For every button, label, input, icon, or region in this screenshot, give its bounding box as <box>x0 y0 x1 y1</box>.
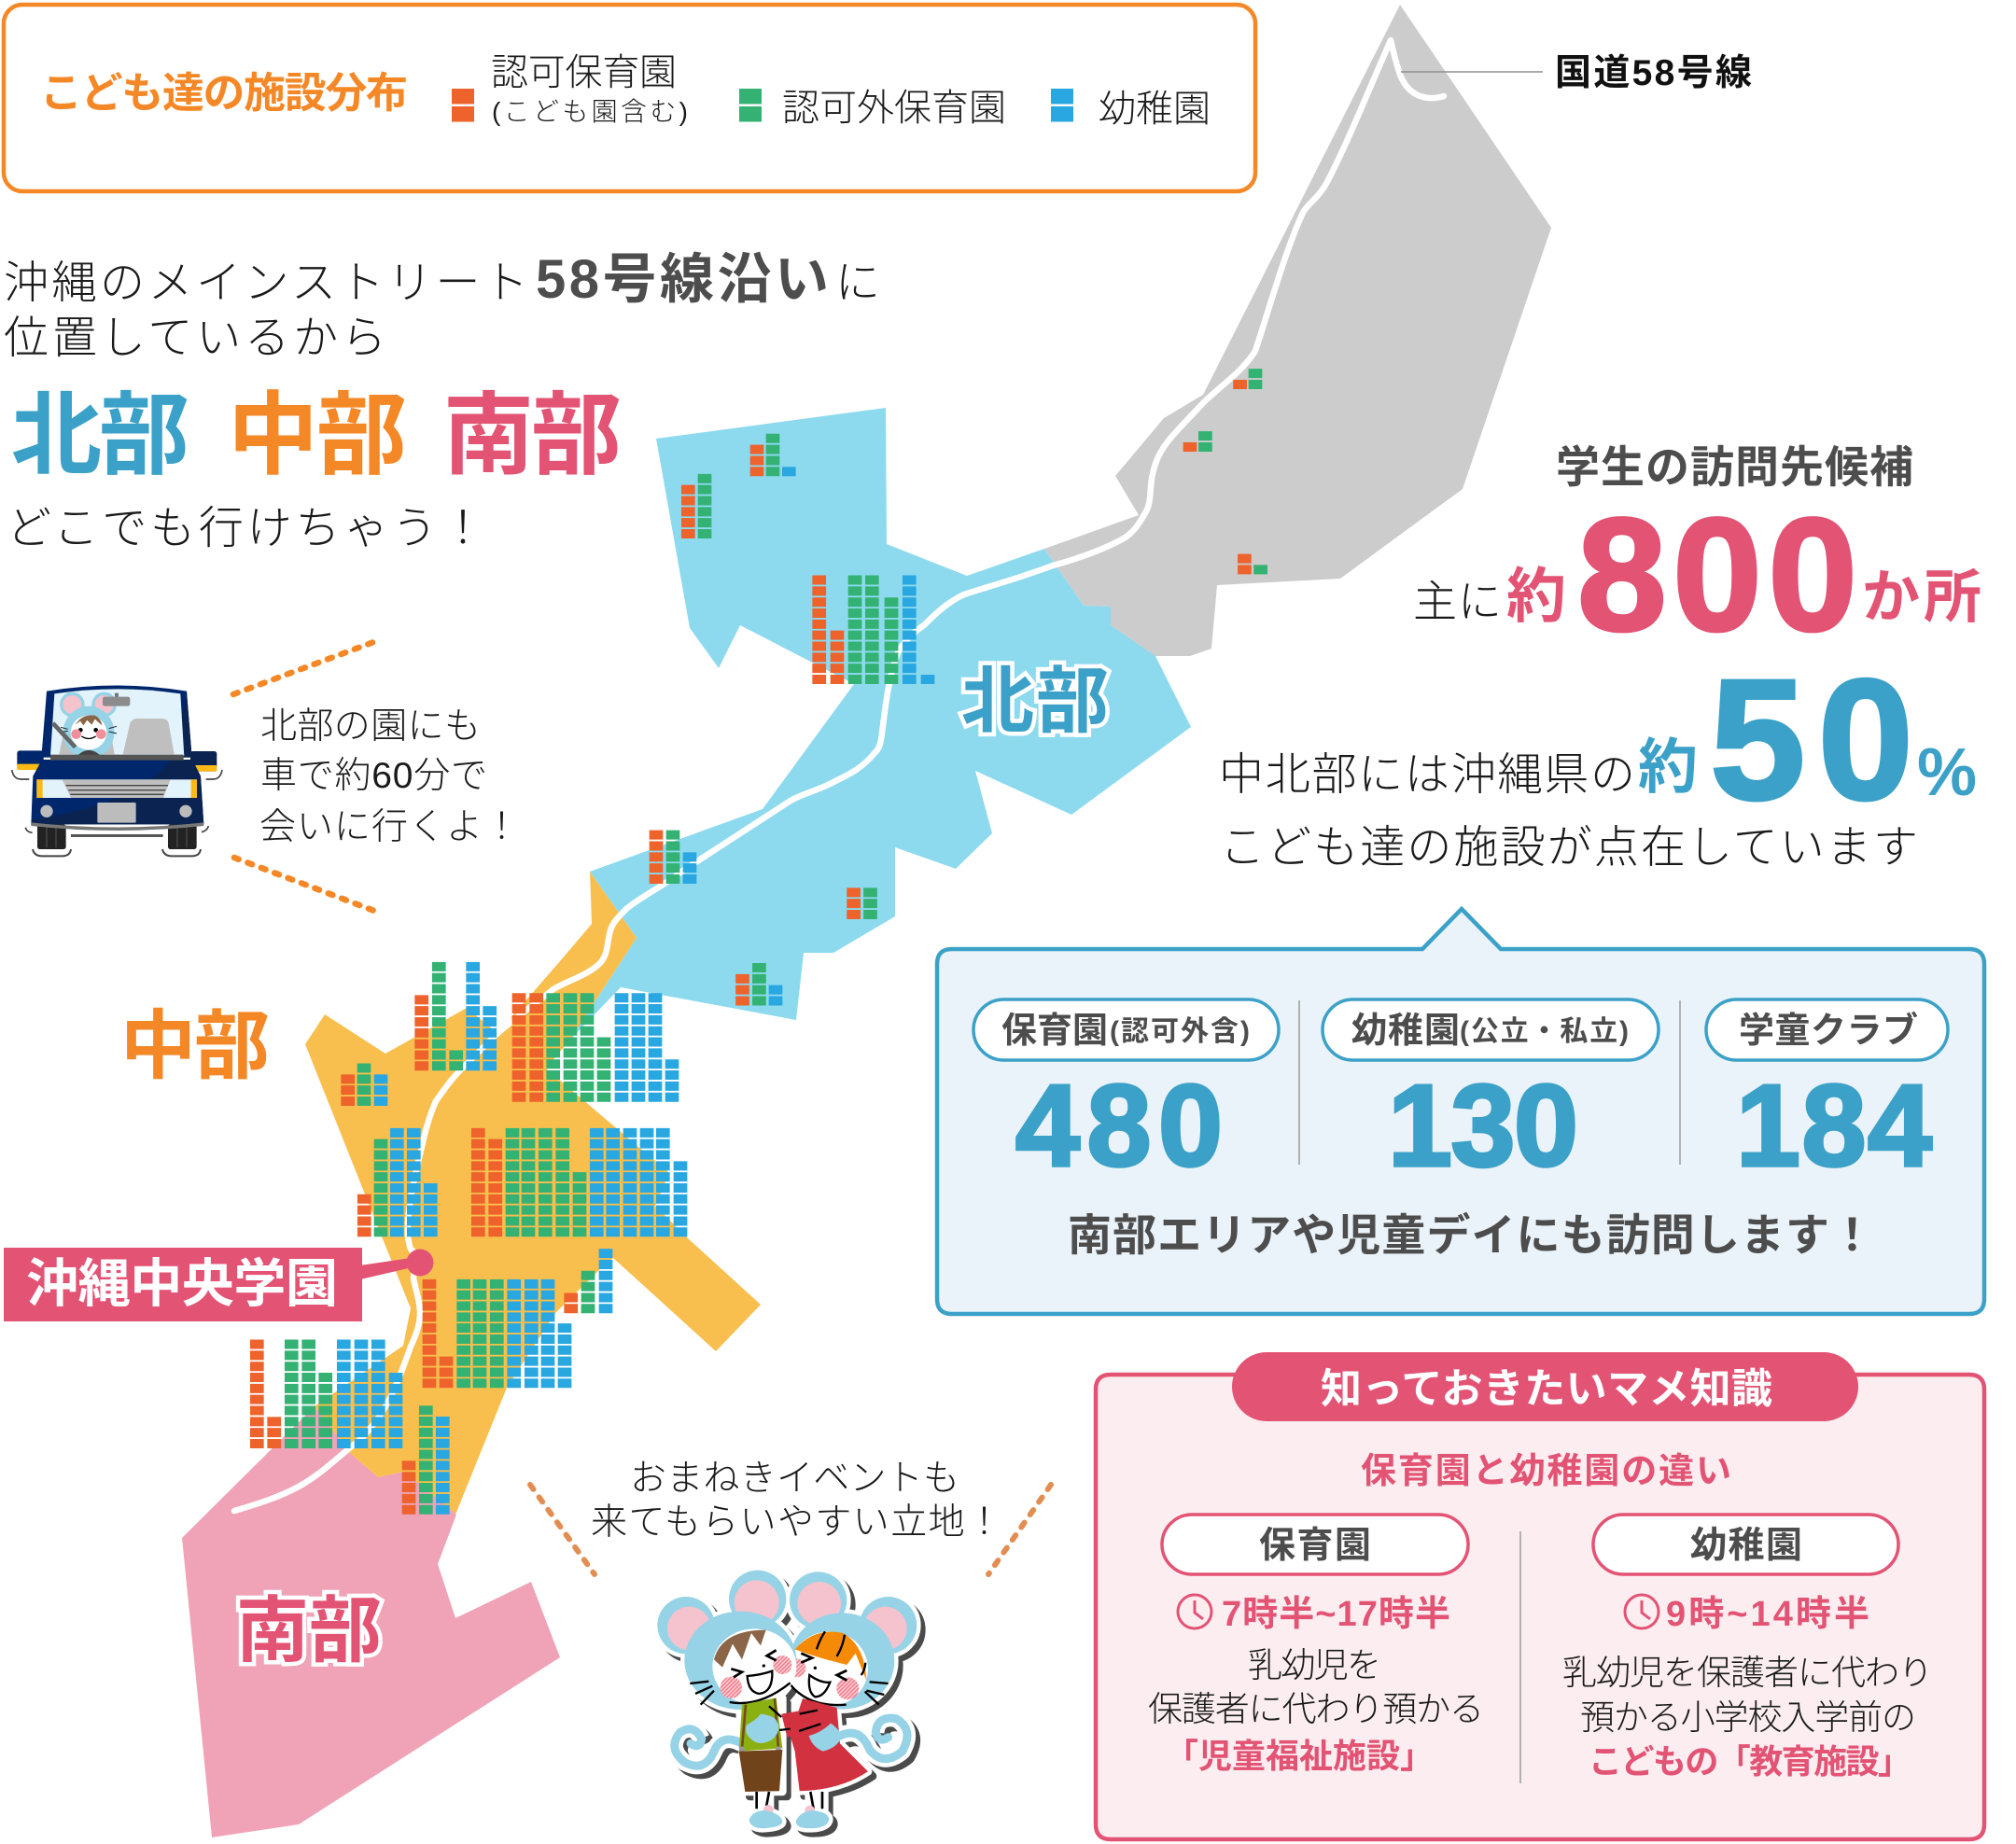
count: kindergarten <box>1323 999 1659 1191</box>
stat: 50 percent: こども達の施設が点在しています <box>1220 823 1918 873</box>
count: kindergarten: 幼稚園 <box>1351 1012 1460 1051</box>
region headline: 南部 <box>443 384 622 486</box>
count: nursery: 保育園 <box>1001 1012 1108 1051</box>
dotted callout lines: car <box>233 641 376 911</box>
panel: trivia <box>1096 1352 1984 1839</box>
column: kindergarten: 乳幼児を保護者に代わり <box>1562 1654 1933 1692</box>
stat: visit candidates: か所 <box>1862 566 1981 630</box>
column: kindergarten: 幼稚園 <box>1690 1526 1802 1566</box>
stat: 50 percent: % <box>1917 735 1977 810</box>
hugging arms <box>746 1706 842 1752</box>
count: nursery <box>973 999 1279 1191</box>
intro heading <box>4 249 880 363</box>
map label: south: 南部 <box>236 1589 382 1671</box>
map label: north: 北部 <box>961 660 1109 742</box>
count: after-school club: 学童クラブ <box>1739 1011 1918 1051</box>
map label: central: 中部 <box>120 1005 270 1089</box>
car caption: 車で約60分で <box>260 756 487 796</box>
region headline: 北部 <box>11 384 189 486</box>
column: nursery: 7時半~17時半 <box>1222 1595 1450 1634</box>
icon: clock <box>1178 1595 1211 1628</box>
illustration: mouse-costume children <box>657 1571 921 1833</box>
region: north blue <box>569 408 1191 1041</box>
facility blocks: north <box>656 434 928 1006</box>
school pin callout: 沖縄中央学園 <box>26 1254 338 1313</box>
stat: visit candidates: 800 <box>1577 485 1857 664</box>
car caption: 会いに行くよ！ <box>259 807 520 847</box>
icon: car with mouse driver <box>12 685 222 856</box>
column: nursery: 乳幼児を <box>1248 1646 1381 1684</box>
car caption <box>259 706 520 847</box>
facility blocks: south <box>257 1340 442 1515</box>
column: kindergarten: 預かる小学校入学前の <box>1580 1698 1916 1737</box>
intro heading: 位置しているから <box>4 314 386 363</box>
count: after-school club: 184 <box>1736 1062 1932 1191</box>
event caption <box>591 1459 1002 1543</box>
intro heading: 58号線沿い <box>536 249 829 310</box>
trivia subtitle: 保育園と幼稚園の違い <box>1361 1452 1731 1491</box>
road: route 58 <box>234 40 1444 1511</box>
girl <box>787 1572 917 1828</box>
legend panel <box>4 5 1255 191</box>
count: nursery: (認可外含) <box>1110 1016 1250 1047</box>
intro heading: 沖縄のメインストリート <box>4 258 528 308</box>
column: nursery: 保育園 <box>1259 1526 1371 1566</box>
route label: 国道58号線 <box>1555 53 1752 93</box>
sticker shadow <box>662 1575 921 1833</box>
facility blocks: central <box>348 962 680 1388</box>
stat: 50 percent: 50 <box>1710 643 1913 835</box>
stat: visit candidates: 主に <box>1413 577 1502 626</box>
region: central orange <box>305 872 761 1515</box>
region: south pink <box>182 1406 560 1837</box>
legend item: kindergarten: 幼稚園 <box>1099 89 1211 130</box>
stat: visit candidates: 学生の訪問先候補 <box>1556 442 1913 492</box>
facility blocks: far north <box>1190 369 1261 574</box>
count: kindergarten: 130 <box>1388 1062 1578 1191</box>
intro heading: に <box>835 258 880 308</box>
column: nursery: 「児童福祉施設」 <box>1165 1737 1434 1775</box>
legend item: unlicensed nursery: 認可外保育園 <box>782 88 1006 129</box>
column: kindergarten <box>1562 1515 1933 1781</box>
stat: 50 percent <box>1219 643 1977 873</box>
stat: visit candidates: 約 <box>1506 563 1566 630</box>
tails <box>675 1718 907 1766</box>
column: kindergarten: 9時~14時半 <box>1666 1595 1869 1634</box>
count: nursery: 480 <box>1015 1062 1223 1191</box>
count: kindergarten: (公立・私立) <box>1460 1016 1629 1047</box>
trivia title: 知っておきたいマメ知識 <box>1321 1366 1772 1412</box>
stat: visit candidates <box>1413 442 1981 664</box>
column: kindergarten: こどもの「教育施設」 <box>1589 1742 1911 1781</box>
sticker white outline <box>657 1571 917 1828</box>
panel: facility counts <box>937 909 1984 1314</box>
map of Okinawa <box>120 5 1551 1837</box>
school pin callout <box>4 1248 433 1321</box>
region headline: 中部 <box>228 384 407 486</box>
count: after-school club <box>1706 999 1948 1191</box>
intro closing text: どこでも行けちゃう！ <box>7 504 485 553</box>
region headline <box>11 384 622 486</box>
event caption: 来てもらいやすい立地！ <box>591 1502 1002 1543</box>
car caption: 北部の園にも <box>260 706 481 747</box>
stat: 50 percent: 約 <box>1638 733 1698 801</box>
stat: 50 percent: 中北部には沖縄県の <box>1219 750 1635 800</box>
boy <box>657 1571 796 1828</box>
leader line to route label <box>1401 71 1543 73</box>
event caption: おまねきイベントも <box>630 1459 959 1499</box>
icon: clock <box>1625 1595 1659 1628</box>
panel note: 南部エリアや児童デイにも訪問します！ <box>1068 1210 1874 1260</box>
legend title: こども達の施設分布 <box>40 69 408 117</box>
legend item: licensed nursery: (こども園含む) <box>492 97 688 126</box>
dotted callout lines: event <box>530 1485 1051 1574</box>
column: nursery <box>1148 1515 1484 1775</box>
region: northern tip gray <box>1044 5 1551 656</box>
legend item: licensed nursery <box>452 52 688 126</box>
legend item: licensed nursery: 認可保育園 <box>491 52 677 93</box>
trivia title <box>1232 1352 1858 1421</box>
column: nursery: 保護者に代わり預かる <box>1148 1690 1484 1728</box>
